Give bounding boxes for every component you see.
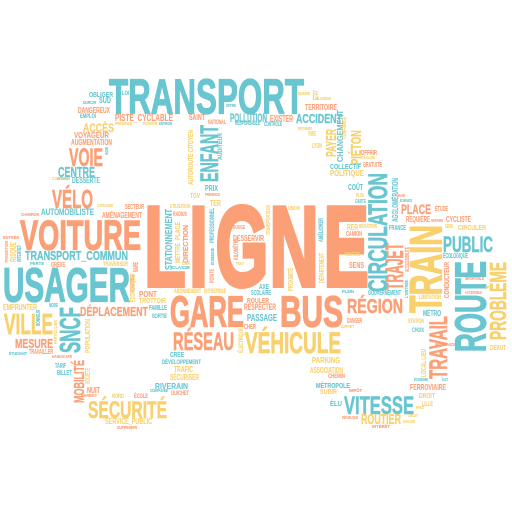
- medium orange words: CONDUCTEUR: [444, 262, 451, 298]
- medium yellow words: PARKING: [312, 355, 340, 365]
- medium yellow words: PARTICULIER: [53, 319, 58, 344]
- medium orange words: AUGMENTATION: [71, 137, 112, 147]
- medium teal words: COLLECTIF: [330, 164, 362, 171]
- medium orange words: ACCESSIBLE: [465, 290, 482, 295]
- medium yellow words: SUPPORT: [341, 324, 354, 329]
- medium teal words: PERTE: [30, 261, 44, 266]
- medium teal words: [9, 91, 468, 408]
- word: TRAIN: TRAIN: [400, 225, 452, 313]
- medium yellow words: PIÉTONNIER: [298, 124, 312, 131]
- word: DÉPLACEMENT: DÉPLACEMENT: [80, 304, 148, 319]
- medium teal words: ÉCHÉANCE: [400, 196, 412, 203]
- medium orange words: ÉTUDE: [435, 204, 448, 213]
- word: GARE: GARE: [170, 288, 244, 336]
- medium yellow words: RISQUE: [9, 242, 18, 262]
- word: VÉHICULE: VÉHICULE: [245, 326, 341, 360]
- medium teal words: AXE: [259, 284, 269, 291]
- word: ENFANT: ENFANT: [196, 125, 224, 182]
- medium yellow words: TER: [210, 199, 221, 208]
- medium yellow words: GÉRER: [445, 222, 453, 230]
- medium orange words: NATIONAL: [208, 120, 226, 126]
- medium teal words: FAMILLE: [149, 305, 167, 312]
- medium orange words: [3, 102, 484, 430]
- medium orange words: IMPÔT: [349, 386, 362, 393]
- medium orange words: NUIT: [87, 385, 101, 395]
- word: ACCIDENT: ACCIDENT: [296, 111, 342, 126]
- medium orange words: ACCESSIBILITÉ: [403, 247, 411, 272]
- medium teal words: DESSERTE: [72, 176, 100, 185]
- word: TRANSPORT: TRANSPORT: [109, 70, 304, 124]
- medium yellow words: SUBIR: [320, 389, 337, 396]
- medium teal words: ÉLU: [330, 399, 342, 408]
- medium yellow words: EUROPE: [298, 91, 310, 96]
- word: PAYER: PAYER: [324, 129, 340, 157]
- medium yellow words: TRANSPORTEUR: [266, 205, 272, 235]
- medium teal words: ENSEIGNE: [210, 248, 215, 265]
- word: USAGER: USAGER: [3, 260, 130, 312]
- word: VITESSE: VITESSE: [344, 392, 414, 420]
- medium orange words: GUICHET: [171, 391, 189, 397]
- medium yellow words: FOLKLORE: [361, 155, 375, 160]
- medium orange words: IMPORTABLE: [465, 276, 484, 281]
- medium yellow words: ÉTAT: [311, 90, 320, 100]
- medium teal words: BILLET: [57, 370, 72, 377]
- medium orange words: CAMION: [346, 231, 362, 238]
- medium yellow words: CONFIANCE: [342, 117, 348, 139]
- word: LIGNE: LIGNE: [144, 183, 369, 310]
- medium orange words: BAIN: [398, 193, 405, 198]
- medium yellow words: PLACE: [175, 222, 182, 240]
- medium yellow words: PLUS: [356, 193, 364, 199]
- medium yellow words: CAR: [182, 261, 190, 267]
- medium orange words: PARENT: [81, 393, 97, 398]
- medium yellow words: DROIT: [419, 391, 435, 400]
- word: VÉLO: VÉLO: [52, 184, 93, 214]
- word: PROBLÈME: PROBLÈME: [484, 262, 511, 340]
- medium yellow words: LOCAL LIEU: [421, 349, 428, 377]
- medium teal words: AUTOMOBILISTE: [41, 207, 94, 218]
- medium orange words: RÉPUBLIQUE: [342, 413, 358, 420]
- medium teal words: EMPLOI: [80, 114, 96, 120]
- medium yellow words: SÉCURISER: [170, 373, 199, 382]
- medium yellow words: [3, 90, 506, 426]
- medium orange words: EXISTER: [270, 114, 293, 125]
- medium orange words: PISTE_CYCLABLE: [115, 113, 173, 124]
- medium yellow words: STATION: [408, 319, 424, 325]
- medium orange words: HANDICAPÉ: [52, 352, 72, 359]
- medium orange words: DESSERVIR: [233, 233, 264, 243]
- medium orange words: DANGEREUX: [78, 105, 110, 115]
- medium yellow words: AUTOROUTE CITOYEN: [186, 130, 195, 185]
- word: RÉSEAU: RÉSEAU: [173, 327, 234, 356]
- medium yellow words: CATÉGORIE: [97, 201, 113, 208]
- medium orange words: VOYAGEUR: [74, 130, 109, 140]
- medium yellow words: SOCIÉTÉ: [83, 368, 92, 384]
- medium orange words: HORAIRE: [431, 218, 443, 223]
- medium yellow words: FINISTÈRE: [344, 250, 360, 258]
- word: VOITURE: VOITURE: [20, 212, 141, 258]
- medium orange words: ENTRÉE: [3, 233, 19, 240]
- medium yellow words: TRAFIC: [174, 365, 193, 374]
- medium yellow words: ÉCONOMIQUE: [128, 275, 137, 302]
- medium teal words: ÉTUDIANT: [9, 349, 27, 356]
- medium orange words: CHER: [244, 324, 256, 331]
- word: TRAVAIL: TRAVAIL: [425, 316, 453, 379]
- medium teal words: CARTE: [355, 199, 366, 205]
- medium teal words: SCOLAIRE: [251, 290, 271, 297]
- medium teal words: GOUVERNEMENT: [368, 290, 401, 297]
- medium teal words: L'ENTRÉE: [402, 280, 409, 298]
- medium teal words: BONHEUR: [36, 310, 42, 326]
- medium orange words: TRANSITION: [4, 241, 9, 263]
- medium yellow words: PROXIMITÉ: [286, 268, 295, 291]
- medium yellow words: ASSOCIATION: [310, 365, 343, 375]
- medium teal words: ÉCONOMIE: [414, 375, 428, 382]
- word: CIRCULATION: CIRCULATION: [363, 173, 393, 292]
- word: POLLUTION: POLLUTION: [230, 113, 267, 125]
- medium orange words: KILOMÈTRE: [232, 238, 240, 260]
- word: MOBILITÉ: MOBILITÉ: [71, 360, 88, 403]
- medium yellow words: TRAIT: [236, 261, 244, 266]
- medium orange words: PRÉSENCE: [205, 190, 220, 197]
- medium yellow words: UTILISATION: [170, 204, 190, 210]
- medium teal words: AGGLOMÉRATION: [391, 178, 400, 222]
- medium teal words: CLASSE: [172, 265, 190, 270]
- medium teal words: SORTIE: [152, 313, 167, 320]
- medium orange words: CYCLISTE: [446, 214, 471, 224]
- medium orange words: ROULER: [247, 298, 269, 305]
- medium yellow words: RER: [347, 223, 358, 232]
- medium teal words: PASSAGE: [247, 313, 277, 324]
- medium yellow words: LYON: [312, 143, 322, 150]
- medium orange words: FERROVIAIRE: [410, 382, 446, 392]
- medium orange words: ROUGE: [233, 225, 245, 231]
- medium yellow words: PASSION: [143, 121, 157, 126]
- medium orange words: OFFRIR: [361, 150, 377, 157]
- medium orange words: IMPORTANCE: [435, 342, 455, 347]
- medium orange words: SECTEUR: [125, 204, 144, 211]
- medium orange words: ÉCOLE: [134, 392, 148, 400]
- medium teal words: PROFIL: [57, 176, 69, 181]
- word: ROUTE: ROUTE: [446, 261, 496, 352]
- medium teal words: COMPAGNIE: [150, 388, 168, 393]
- word: MESURE: MESURE: [15, 336, 53, 351]
- medium yellow words: ÉLUSION: [316, 94, 331, 101]
- medium yellow words: SAVOIR: [403, 419, 416, 424]
- medium yellow words: EMPRUNTER: [3, 303, 37, 312]
- medium teal words: SUD: [99, 96, 111, 105]
- word: SÉCURITÉ: SÉCURITÉ: [88, 396, 167, 424]
- medium teal words: PRIX: [205, 183, 218, 193]
- medium yellow words: UNION: [288, 206, 300, 212]
- medium yellow words: LIMITATION: [419, 295, 441, 301]
- medium teal words: RIVERAIN: [155, 381, 188, 391]
- medium yellow words: PRÉSENCE: [115, 119, 132, 126]
- medium teal words: PROFESSIONNEL: [209, 208, 216, 243]
- word: ROUTIER: ROUTIER: [361, 411, 401, 428]
- medium yellow words: ABONNEMENT: [174, 288, 201, 295]
- medium orange words: DIRECTION: [183, 225, 190, 263]
- medium orange words: RADIUS: [173, 212, 187, 218]
- medium teal words: DÉVELOPPEMENT: [162, 358, 201, 366]
- medium yellow words: ÉLECTRIQUE: [237, 328, 245, 353]
- medium teal words: AIDE: [104, 147, 109, 155]
- word: RÉGION: RÉGION: [347, 295, 403, 318]
- medium teal words: OFFRE: [226, 103, 236, 108]
- medium teal words: CHOIX: [412, 327, 424, 334]
- medium yellow words: TRAVERSER: [103, 261, 128, 268]
- medium teal words: CONTRÔLE: [264, 120, 282, 128]
- word: PLACE: PLACE: [401, 202, 431, 217]
- medium teal words: RESPONSABLE: [235, 121, 260, 127]
- medium teal words: COÛT: [348, 181, 363, 192]
- medium orange words: TRAVAILLER: [29, 349, 53, 356]
- medium orange words: CHEMIN: [328, 374, 345, 380]
- medium teal words: CRÉE: [170, 350, 184, 359]
- medium yellow words: POLITIQUE: [330, 168, 364, 178]
- medium orange words: CHAMPION: [21, 212, 39, 217]
- medium yellow words: POPULATION: [85, 319, 92, 353]
- medium teal words: PLEIN: [342, 289, 354, 294]
- medium yellow words: CIRCUIT: [408, 413, 418, 418]
- medium teal words: FRANCE: [389, 225, 406, 232]
- word cloud in the shape of a bicycle: TRAJET: [381, 243, 409, 290]
- medium orange words: PONT: [139, 289, 158, 299]
- medium yellow words: LILLE: [422, 401, 433, 408]
- medium teal words: STATIONNEMENT: [164, 209, 175, 270]
- word: PIÉTON: PIÉTON: [348, 130, 365, 165]
- medium teal words: AMÉLIORER: [317, 218, 325, 242]
- medium teal words: ÎLOT: [441, 375, 448, 382]
- medium orange words: INTÉRÊT: [372, 422, 390, 429]
- medium teal words: CHANGEMENT: [336, 110, 345, 162]
- medium yellow words: ENTREPRISE: [204, 288, 226, 295]
- medium yellow words: PIED: [416, 405, 425, 410]
- word: CENTRE: CENTRE: [58, 165, 95, 181]
- medium orange words: TERRITOIRE: [305, 102, 337, 112]
- medium teal words: MODE: [49, 303, 58, 309]
- word: ACCÈS: ACCÈS: [83, 122, 114, 135]
- medium orange words: POINTE: [210, 269, 216, 283]
- medium yellow words: CIRCULER: [458, 223, 486, 232]
- medium orange words: ACCESSIBLE: [130, 274, 136, 292]
- word: SNCF: SNCF: [55, 307, 87, 353]
- medium orange words: REQUIÈRE: [406, 214, 430, 224]
- medium teal words: ENVIRON: [159, 121, 172, 126]
- medium yellow words: COIFFEUR: [52, 176, 71, 181]
- medium teal words: INTERNET: [17, 245, 23, 262]
- medium orange words: SAINT: [189, 112, 206, 122]
- word: VOIE: VOIE: [69, 144, 103, 172]
- medium yellow words: TROTTOIR: [139, 296, 166, 305]
- medium teal words: MÉTRO: [423, 309, 441, 318]
- medium orange words: MAIRE: [133, 262, 140, 272]
- medium yellow words: TGV: [190, 193, 200, 200]
- word: BUS: BUS: [280, 288, 343, 336]
- medium orange words: GRÈVE: [51, 260, 65, 269]
- medium teal words: MÉTROPOLE: [316, 381, 350, 390]
- medium yellow words: RÉDUCTION: [359, 222, 377, 230]
- medium orange words: AMÉNAGEMENT: [102, 210, 142, 220]
- medium teal words: AUDITEUR: [218, 132, 224, 160]
- medium teal words: OBLIGER: [89, 92, 113, 99]
- medium teal words: LOI: [122, 91, 129, 97]
- medium orange words: DANGER: [347, 318, 362, 325]
- medium yellow words: SERVICE_PUBLIC: [105, 416, 152, 426]
- medium yellow words: NORD: [112, 394, 124, 400]
- medium yellow words: METTRE: [175, 243, 182, 263]
- medium orange words: RESPECTER: [244, 302, 276, 312]
- medium orange words: GRATUITÉ: [363, 160, 382, 169]
- medium orange words: SUPPRIMER: [117, 425, 138, 430]
- medium teal words: ÉCOLOGIQUE: [443, 251, 468, 260]
- word: TRANSPORT_COMMUN: TRANSPORT_COMMUN: [25, 249, 128, 263]
- medium teal words: TARIF: [55, 363, 66, 370]
- word: VILLE: VILLE: [4, 309, 53, 341]
- medium teal words: DURCIR: [83, 100, 97, 105]
- medium orange words: SENS: [349, 261, 364, 270]
- medium yellow words: DÉPARTEMENT: [317, 253, 326, 283]
- medium yellow words: VIVRE: [308, 131, 316, 138]
